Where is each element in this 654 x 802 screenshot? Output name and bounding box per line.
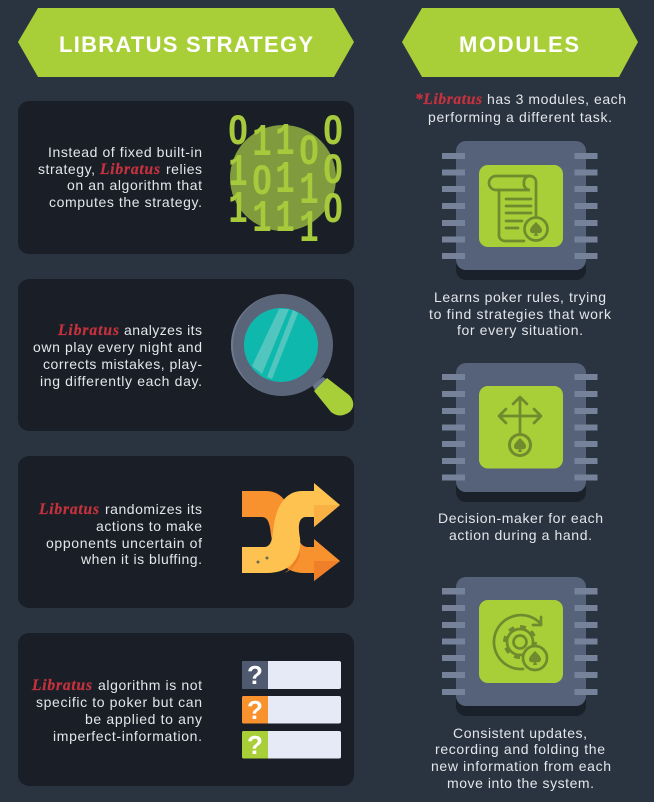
icon: binary circle: 0 [299, 127, 319, 174]
text: rules module [429, 289, 612, 338]
text: updates module: Consistent updates, [453, 725, 587, 741]
heading: Modules: MODULES [459, 32, 579, 57]
text: self analysis [33, 322, 202, 389]
icon: binary circle: 0 [323, 107, 343, 154]
panel: self analysis [18, 279, 354, 431]
text: randomized actions: opponents uncertain of [46, 535, 202, 551]
icon: gear cycle with spade [494, 615, 547, 670]
text: computed strategy: strategy, [38, 161, 95, 177]
text: updates module [431, 725, 611, 791]
text: rules module: for every situation. [457, 322, 583, 338]
icon: question bars [242, 660, 341, 760]
text: computed strategy: Libratus [99, 161, 160, 178]
icon: binary circle: 1 [275, 116, 295, 168]
text: decision module: action during a hand. [449, 527, 592, 543]
heading: Libratus Strategy [18, 8, 354, 77]
icon: binary circle: 1 [275, 193, 295, 245]
text: modules intro: has 3 modules, each [487, 91, 626, 107]
text: rules module: Learns poker rules, trying [434, 289, 606, 305]
text: decision module [438, 510, 603, 543]
module chip: rules [442, 141, 598, 280]
icon: question bars: ? [247, 695, 263, 725]
text: self analysis: analyzes its [124, 322, 202, 338]
icon: magnifying glass [231, 294, 353, 415]
text: rules module: to find strategies that work [429, 306, 612, 322]
icon: binary circle [228, 107, 343, 255]
icon: binary circle: 1 [252, 193, 272, 245]
icon: scroll with spade [489, 176, 548, 241]
icon: directional arrows with spade [499, 397, 541, 456]
icon: binary circle: 1 [299, 165, 319, 217]
heading: Modules [402, 8, 638, 77]
icon: question bars: ? [247, 730, 263, 760]
text: imperfect information: imperfect-information. [53, 728, 202, 744]
text: computed strategy [38, 144, 202, 210]
text: computed strategy: computes the strategy. [49, 194, 202, 210]
text: randomized actions: Libratus [38, 501, 99, 518]
text: self analysis: Libratus [57, 322, 119, 339]
text: modules intro [415, 91, 626, 125]
module chip: decision [442, 363, 598, 502]
text: imperfect information: be applied to any [85, 711, 202, 727]
text: imperfect information: Libratus [31, 677, 92, 694]
text: updates module: recording and folding the [435, 741, 605, 757]
text: computed strategy: Instead of fixed built-in [48, 144, 202, 160]
icon: binary circle: 0 [228, 107, 248, 154]
icon: binary circle: 0 [252, 157, 272, 204]
module chip: updates [442, 577, 598, 716]
text: imperfect information: specific to poker but can [36, 694, 202, 710]
icon: binary circle: 1 [228, 147, 248, 199]
icon: binary circle: 1 [275, 154, 295, 206]
text: randomized actions: actions to make [96, 518, 202, 534]
text: imperfect information: algorithm is not [98, 677, 202, 693]
icon: binary circle: 1 [252, 117, 272, 169]
icon: binary circle: 0 [323, 146, 343, 193]
text: randomized actions: randomizes its [105, 501, 202, 517]
text: computed strategy: relies [166, 161, 202, 177]
icon: question bars: ? [247, 660, 263, 690]
text: modules intro: performing a different task. [428, 109, 612, 125]
panel: imperfect information [18, 633, 354, 786]
text: updates module: new information from each [431, 758, 611, 774]
text: updates module: move into the system. [447, 775, 594, 791]
text: randomized actions [38, 501, 202, 567]
icon: binary circle: 1 [228, 184, 248, 236]
text: self analysis: own play every night and [33, 339, 202, 355]
text: decision module: Decision-maker for each [438, 510, 603, 526]
icon: shuffle arrows [242, 483, 340, 581]
text: self analysis: ing differently each day. [40, 373, 202, 389]
text: randomized actions: when it is bluffing. [80, 551, 202, 567]
text: computed strategy: on an algorithm that [67, 177, 202, 193]
text: self analysis: corrects mistakes, play- [43, 356, 202, 372]
heading: Libratus Strategy: LIBRATUS STRATEGY [59, 32, 313, 57]
panel: computed strategy [18, 101, 354, 255]
panel: randomized actions [18, 456, 354, 608]
icon: binary circle: 1 [299, 203, 319, 255]
text: modules intro: *Libratus [415, 91, 482, 108]
text: imperfect information [31, 677, 202, 744]
icon: binary circle: 0 [323, 185, 343, 232]
